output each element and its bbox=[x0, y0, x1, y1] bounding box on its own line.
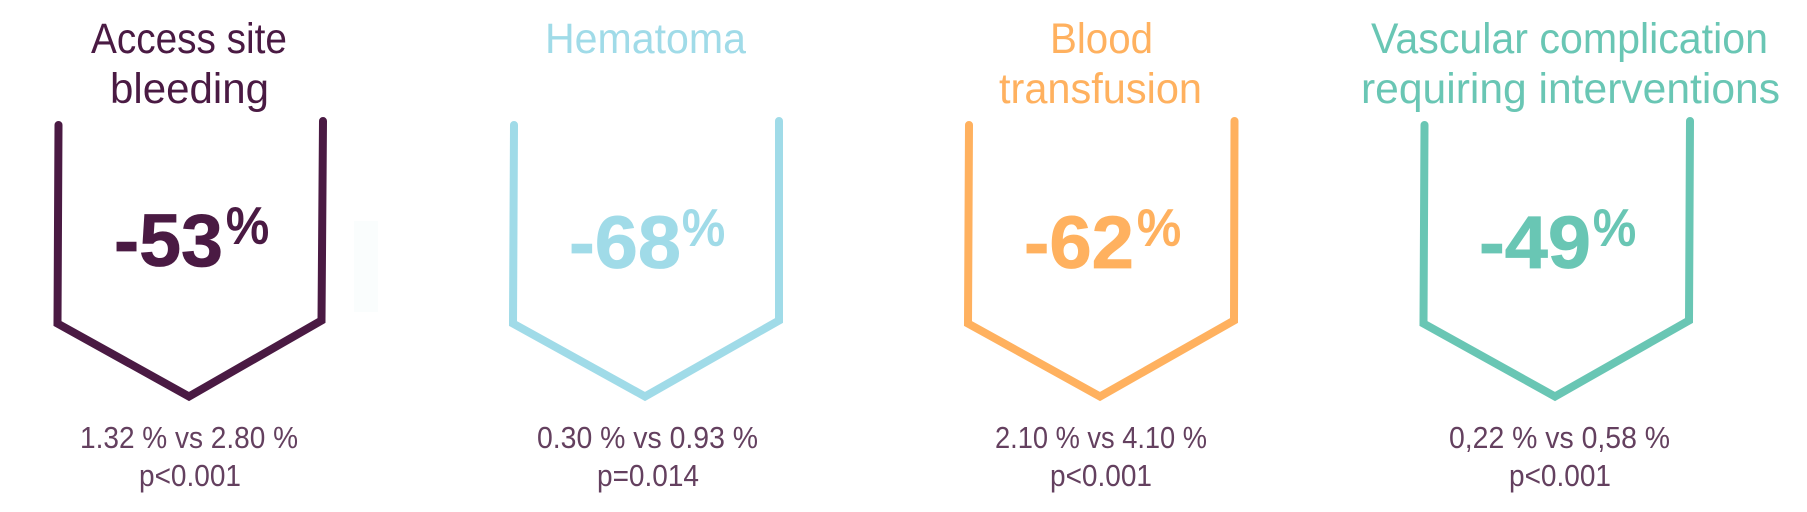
heading: hematoma: Hematoma bbox=[545, 15, 746, 63]
heading: access site bleeding: bleeding bbox=[110, 65, 269, 113]
icon: chevron shield outline bbox=[968, 121, 1234, 396]
comparison values bbox=[1449, 420, 1670, 493]
stat: -49%: % bbox=[1593, 199, 1636, 256]
heading: blood transfusion: transfusion bbox=[999, 65, 1202, 113]
heading: access site bleeding bbox=[91, 15, 287, 113]
panel: hematoma bbox=[513, 15, 779, 493]
comparison values: p=0.014 bbox=[597, 458, 699, 493]
comparison values: 0.30 % vs 0.93 % bbox=[537, 420, 758, 455]
comparison values: 2.10 % vs 4.10 % bbox=[995, 420, 1207, 455]
heading: blood transfusion: Blood bbox=[1050, 15, 1153, 63]
comparison values: 1.32 % vs 2.80 % bbox=[80, 420, 298, 455]
panel: vascular complication bbox=[1361, 15, 1780, 493]
stat: -62% bbox=[1024, 199, 1181, 284]
stat: -53% bbox=[114, 197, 269, 282]
stat: -68%: % bbox=[682, 199, 725, 256]
stat: -49% bbox=[1479, 199, 1636, 284]
comparison values: p<0.001 bbox=[139, 458, 241, 493]
stat: -68% bbox=[569, 199, 725, 284]
stat: -53%: -53 bbox=[114, 199, 223, 282]
comparison values bbox=[995, 420, 1207, 493]
stat: -49%: -49 bbox=[1479, 201, 1591, 284]
heading: vascular complication requiring interventions: Vascular complication bbox=[1371, 15, 1768, 63]
icon: chevron shield outline bbox=[1424, 121, 1690, 396]
stat: -53%: % bbox=[226, 197, 269, 254]
comparison values: 0,22 % vs 0,58 % bbox=[1449, 420, 1670, 455]
heading: blood transfusion bbox=[999, 15, 1202, 113]
stat: -62%: % bbox=[1137, 199, 1181, 256]
heading: vascular complication requiring interventions bbox=[1361, 15, 1780, 113]
comparison values: p<0.001 bbox=[1509, 458, 1611, 493]
stat: -62%: -62 bbox=[1024, 201, 1134, 284]
panel: access site bleeding bbox=[58, 15, 323, 493]
comparison values bbox=[80, 420, 298, 493]
heading: vascular complication requiring interventions: requiring interventions bbox=[1361, 65, 1780, 113]
stat: -68%: -68 bbox=[569, 201, 681, 284]
faint background patch bbox=[354, 221, 378, 312]
icon: chevron shield outline bbox=[58, 121, 323, 396]
heading: access site bleeding: Access site bbox=[91, 15, 287, 63]
comparison values: p<0.001 bbox=[1050, 458, 1152, 493]
comparison values bbox=[537, 420, 758, 493]
icon: chevron shield outline bbox=[513, 121, 779, 396]
panel: blood transfusion bbox=[968, 15, 1234, 493]
